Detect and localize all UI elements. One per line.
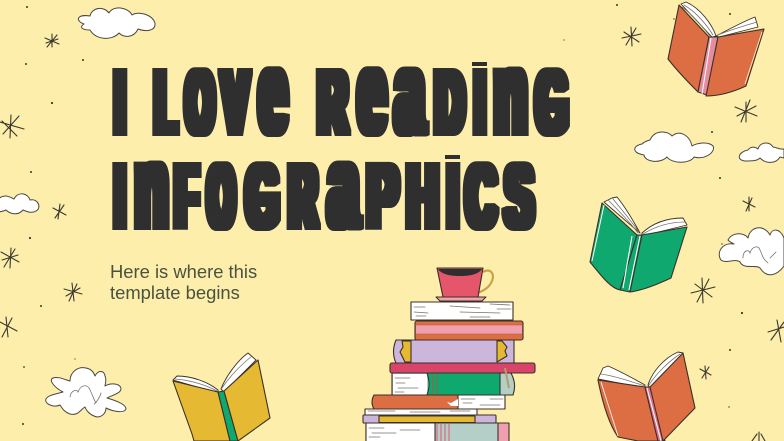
title: R [289, 147, 317, 247]
title: S [505, 147, 534, 247]
cloud: right edge [719, 228, 784, 275]
book: orange bottom right [598, 352, 695, 441]
title: G [536, 53, 568, 153]
title: R [318, 53, 347, 153]
covers [668, 5, 709, 92]
book 2: orange and pink [415, 321, 523, 340]
book 8: lilac and yellow [363, 415, 496, 423]
cloud: right [635, 132, 714, 162]
title: e [358, 27, 386, 159]
book 1: white [411, 302, 513, 320]
title: H [407, 147, 438, 247]
book 9: white, teal, pink [366, 423, 509, 441]
title: L [154, 53, 176, 153]
book 7: white [365, 409, 477, 415]
book: green [590, 197, 687, 292]
title: a [395, 27, 424, 159]
title: n [494, 27, 527, 159]
title: e [259, 27, 287, 159]
subtitle: Here is where this [110, 261, 257, 282]
subtitle: template begins [110, 282, 240, 303]
title: n [134, 121, 168, 253]
dots over the letter i [445, 62, 487, 159]
book 4: crimson [390, 363, 535, 373]
book stack [363, 268, 535, 441]
title: I [448, 147, 457, 247]
book 6: orange and white [372, 395, 505, 409]
book 3: lilac [394, 340, 514, 363]
subtitle [110, 261, 257, 303]
title: O [208, 147, 234, 247]
title: I [475, 53, 484, 153]
cloud: top left [78, 8, 155, 38]
cloud: bottom left [46, 368, 126, 417]
title: I [115, 147, 124, 247]
title: a [328, 121, 359, 253]
pages [681, 2, 716, 37]
title: O [186, 53, 214, 153]
title: I [115, 53, 124, 153]
title: G [246, 147, 279, 247]
title: C [466, 147, 496, 247]
title: D [435, 53, 464, 153]
title: P [367, 147, 398, 247]
title: F [175, 147, 198, 247]
book: yellow [173, 353, 270, 441]
book: orange top right [668, 2, 764, 96]
title: V [222, 53, 248, 153]
coffee cup [436, 268, 493, 301]
cloud: left [0, 194, 39, 214]
book 5: white, green, teal [392, 368, 515, 395]
cloud: far right [739, 143, 784, 162]
